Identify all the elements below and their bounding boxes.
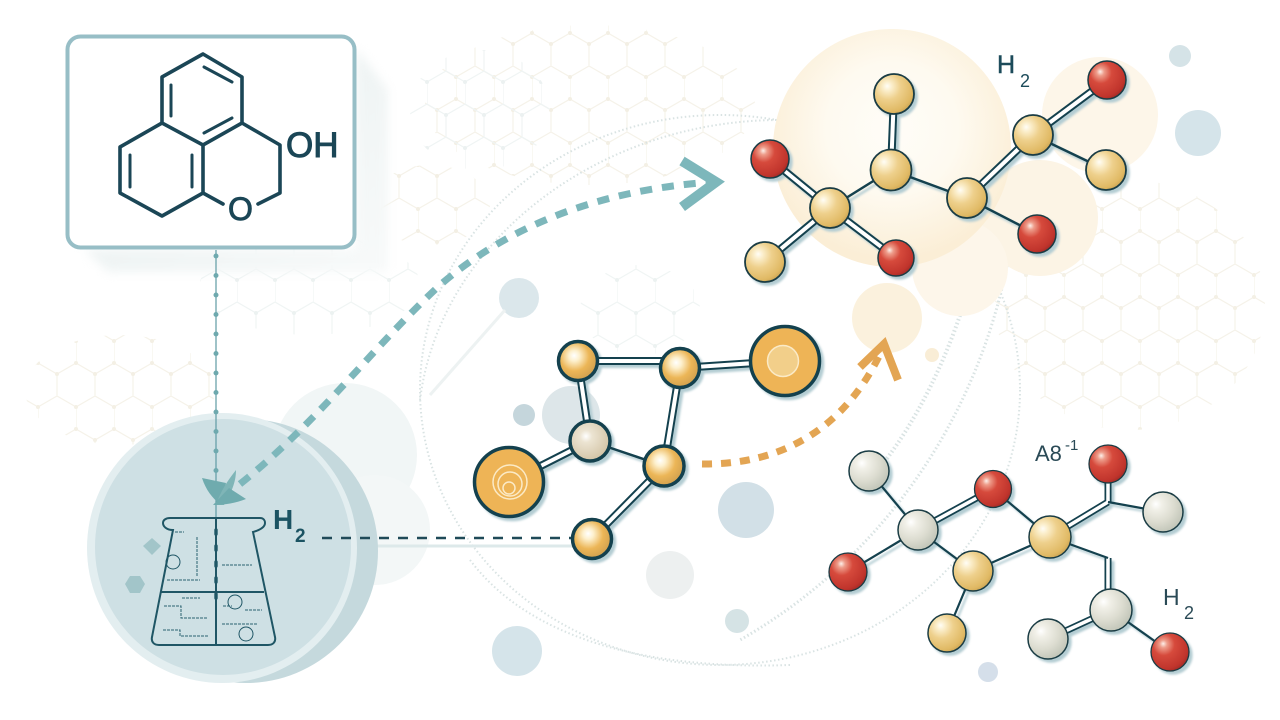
- molecule: lower right: [829, 445, 1189, 671]
- atoms: [558, 342, 598, 380]
- label: H2 lower right: [1163, 584, 1194, 623]
- background: dotted orbit arcs: [420, 115, 1020, 666]
- molecule: central intermediate: [474, 326, 820, 558]
- vertical dotted connector: [215, 250, 217, 645]
- label: H2 at flask: 2: [295, 526, 306, 547]
- background: hexagon lattice: [25, 25, 1265, 445]
- label: H2 at flask: H: [273, 504, 293, 535]
- label: H2 at flask: [273, 504, 306, 547]
- icon: flask: [152, 518, 275, 645]
- label: H2 lower right: H: [1163, 584, 1180, 610]
- atom rings: [493, 346, 798, 499]
- atoms: [849, 451, 889, 491]
- panel shadow: [84, 48, 388, 272]
- bonds: [848, 464, 1170, 652]
- label: A8-1: -1: [1065, 437, 1078, 454]
- label: H2 lower right: 2: [1184, 603, 1194, 623]
- background: soft circles: [273, 45, 1221, 682]
- label: H2 top: H: [997, 51, 1015, 79]
- arrow: orange to top molecule: [702, 344, 898, 464]
- bonds: [509, 361, 785, 539]
- icon: leaf: [202, 470, 246, 505]
- dashed bond from H2 to molecule: [322, 537, 572, 539]
- label: ring oxygen: O: [228, 191, 253, 227]
- label: H2 top: [997, 51, 1030, 91]
- bonds: [765, 80, 1107, 262]
- label: A8-1: [1035, 437, 1078, 466]
- panel: starting compound structure: [68, 36, 354, 248]
- flask annotations: [163, 532, 262, 641]
- label: OH: OH: [286, 126, 338, 165]
- arrow: teal flask to top molecule: [240, 161, 716, 484]
- atoms: [874, 74, 914, 114]
- flask disc: [87, 413, 378, 683]
- label: H2 top: 2: [1020, 71, 1030, 91]
- skeletal formula: [120, 54, 280, 216]
- cream halo behind top molecule: [773, 29, 1158, 353]
- label: A8-1: A8: [1035, 441, 1062, 466]
- molecule: top product: [745, 61, 1126, 282]
